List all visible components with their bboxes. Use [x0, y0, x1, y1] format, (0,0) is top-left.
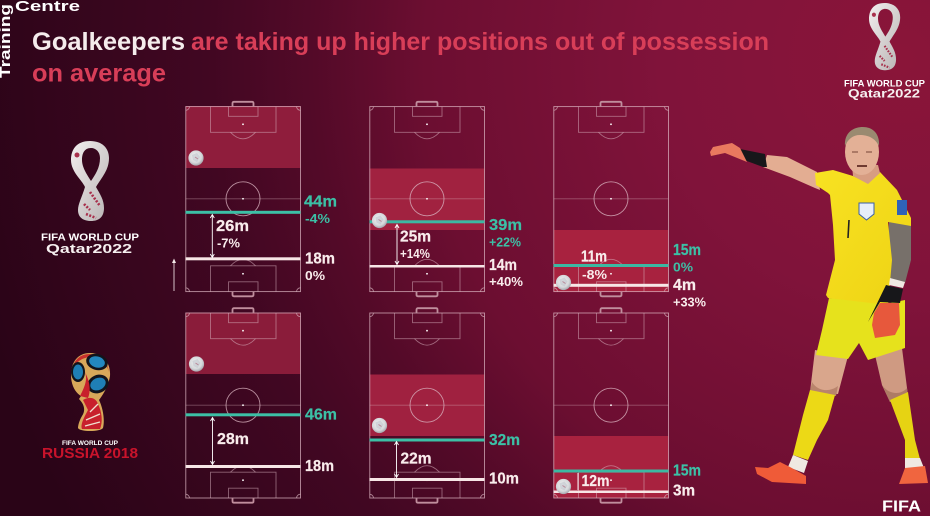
- shorts: [816, 298, 905, 360]
- panel: 2022 mid block: [370, 102, 523, 296]
- panel: 2022 high block: 0%: [305, 269, 325, 283]
- panel: 2022 high block: 18m: [305, 250, 335, 268]
- distance arrow: [394, 442, 398, 478]
- panel: 2022 low block: [554, 102, 706, 310]
- panel: 2022 low block: 4m: [673, 277, 696, 294]
- ball: [556, 479, 571, 494]
- labels: 15m: [673, 462, 701, 480]
- training centre label: [0, 0, 80, 78]
- raised glove: [710, 143, 747, 162]
- panel: 2018 mid block: 22m: [400, 450, 432, 468]
- head: [845, 129, 879, 175]
- logo: Qatar 2022 top right: Qatar2022: [848, 86, 920, 100]
- logo: Russia 2018: FIFA WORLD CUP: [62, 440, 118, 447]
- hair: [845, 127, 879, 146]
- panel: 2018 mid block: 10m: [489, 470, 519, 488]
- labels: 32m: [489, 432, 520, 449]
- ball: [372, 418, 387, 433]
- sleeve patch: [897, 200, 907, 215]
- panel: 2018 low block: [554, 308, 701, 503]
- title: Goalkeepers: [32, 28, 185, 56]
- logo: Qatar 2022 top right: FIFA WORLD CUP: [844, 78, 925, 88]
- badge: [859, 203, 874, 220]
- lower glove cuff: [868, 285, 903, 322]
- direction arrow: [172, 258, 176, 291]
- panel: 2022 high block: -4%: [305, 212, 330, 226]
- distance arrow: [210, 418, 214, 464]
- panel: 2022 high block: [186, 102, 337, 296]
- panel: 2022 mid block: +14%: [400, 247, 430, 261]
- panel: 2022 high block: 26m: [216, 218, 249, 235]
- labels: 44m: [304, 194, 337, 210]
- jersey: [815, 170, 911, 305]
- panel: 2022 low block: 0%: [673, 260, 693, 274]
- ball: [188, 150, 204, 166]
- panel: 2022 mid block: 25m: [400, 228, 431, 246]
- extended arm: [763, 155, 820, 190]
- labels: 39m: [489, 217, 522, 234]
- panel: 2018 high block: [186, 308, 337, 503]
- right boot: [899, 466, 928, 484]
- left sock: [793, 390, 835, 460]
- FIFA wordmark: FIFA: [882, 498, 921, 516]
- wrist support: [735, 148, 767, 167]
- distance arrow: [395, 224, 399, 264]
- left boot: [755, 462, 806, 484]
- panel: 2022 mid block: 14m: [489, 257, 517, 274]
- white socks: [788, 455, 924, 473]
- arm with tattoo: [888, 222, 911, 283]
- panel: 2022 high block: -7%: [217, 236, 240, 250]
- face details: [852, 151, 872, 153]
- logo: Qatar 2022: [41, 141, 139, 256]
- panel: 2018 high block: 18m: [305, 458, 334, 475]
- title: [32, 28, 769, 88]
- panel: 2018 low block: 12m: [582, 473, 610, 490]
- logo: Russia 2018: [42, 351, 138, 462]
- panel: 2018 low block: 3m: [673, 482, 695, 500]
- ball: [556, 275, 571, 290]
- left leg: [810, 350, 848, 394]
- panel: 2022 low block: 15m: [673, 242, 701, 259]
- right sock: [890, 392, 920, 459]
- panel: 2022 low block: +33%: [673, 296, 706, 310]
- right leg: [875, 348, 908, 402]
- logo: Qatar 2022: Qatar2022: [46, 241, 132, 256]
- logo: Qatar 2022 top right: [844, 3, 925, 101]
- labels: 11m: [581, 248, 607, 266]
- panel: 2018 high block: 28m: [217, 431, 249, 448]
- title: are taking up higher positions out of possession: [191, 28, 769, 56]
- panel: 2022 mid block: +40%: [489, 275, 523, 289]
- shirt number: [848, 220, 849, 238]
- distance arrow: [577, 473, 579, 490]
- goalkeeper figure: [710, 127, 928, 484]
- distance arrow: [210, 214, 214, 258]
- logo: Russia 2018: RUSSIA 2018: [42, 445, 138, 462]
- labels: 46m: [305, 406, 337, 424]
- neck: [852, 165, 880, 184]
- ball: [372, 213, 387, 228]
- lower wrist: [889, 278, 905, 288]
- title: on average: [32, 60, 166, 88]
- lower glove: [872, 303, 900, 338]
- panel: 2022 low block: -8%: [582, 268, 607, 282]
- ball: [189, 356, 204, 372]
- logo: Qatar 2022: FIFA WORLD CUP: [41, 232, 139, 244]
- panel: 2018 mid block: [370, 308, 520, 503]
- panel: 2022 mid block: +22%: [489, 236, 521, 250]
